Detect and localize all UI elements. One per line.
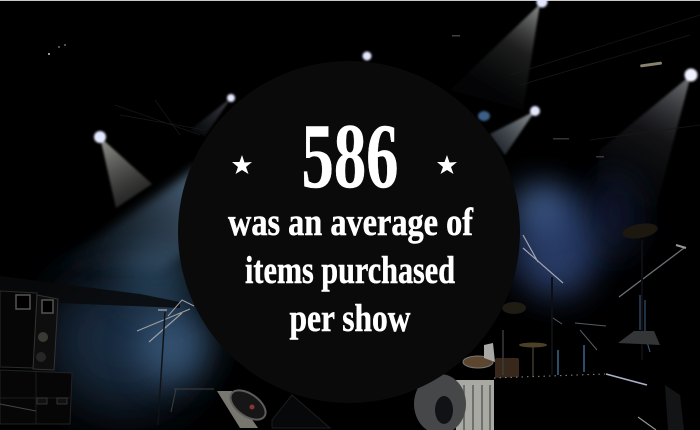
caption text: per show	[290, 297, 410, 340]
caption text: was an average of	[228, 201, 474, 244]
floor monitor	[171, 385, 330, 428]
truss silhouettes	[115, 15, 700, 140]
small stage lights	[48, 35, 662, 158]
icon: left star	[232, 155, 252, 174]
drum kit	[414, 330, 519, 430]
stage riser	[494, 373, 684, 430]
left microphone stands	[137, 300, 194, 425]
stage smoke haze	[50, 111, 641, 410]
speaker stack	[0, 291, 72, 424]
caption text	[228, 201, 474, 340]
light beams	[50, 4, 691, 270]
caption text: items purchased	[245, 249, 455, 292]
circle panel	[178, 61, 520, 403]
right stage: mics and stands	[502, 221, 686, 376]
icon: right star	[437, 155, 457, 174]
spotlights	[94, 0, 698, 143]
overhead banner edge	[0, 276, 180, 308]
big number: 586	[302, 105, 398, 207]
